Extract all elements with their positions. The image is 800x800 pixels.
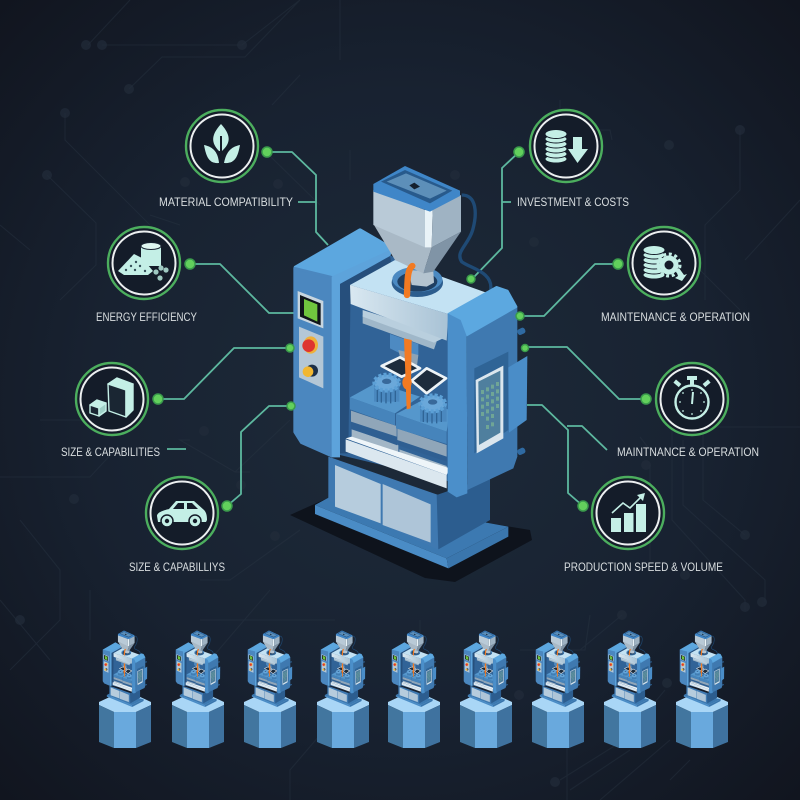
connector lines bbox=[158, 152, 646, 506]
lower shelf bbox=[346, 437, 450, 488]
molten plastic lower stream bbox=[402, 338, 412, 409]
icon: stopwatch bbox=[673, 376, 711, 418]
icon: coin stack with arrow bbox=[545, 130, 588, 163]
badge: material compatibility bbox=[186, 110, 258, 182]
icon: leaves bbox=[204, 124, 240, 163]
mini station 7 bbox=[532, 631, 584, 748]
label: maintenance and operation: MAINTENANCE & OPERATION bbox=[601, 312, 750, 324]
left gear bbox=[374, 375, 399, 403]
right mould stack bbox=[396, 401, 450, 472]
icon: coin stack with gear bbox=[643, 246, 687, 281]
mini station 5 bbox=[388, 631, 440, 748]
hopper bbox=[373, 166, 461, 287]
label: size and capabilities: SIZE & CAPABILITIES bbox=[61, 447, 160, 459]
label: production speed and volume: PRODUCTION SPEED & VOLUME bbox=[564, 562, 723, 574]
badge: maintenance and operation bbox=[628, 227, 700, 299]
badge: size and capabilities bbox=[76, 363, 148, 435]
badge: investment and costs bbox=[530, 110, 602, 182]
mini station 4 bbox=[317, 631, 369, 748]
machine base plate bbox=[315, 495, 508, 568]
right gear bbox=[420, 395, 447, 423]
tablet panel bbox=[474, 352, 508, 453]
control screen bbox=[298, 291, 323, 328]
icon: growth chart bbox=[611, 493, 646, 532]
badge: energy efficiency bbox=[108, 227, 180, 299]
label: material compatibility: MATERIAL COMPATIBILITY bbox=[159, 197, 293, 209]
main machine shadow bbox=[290, 497, 532, 582]
label: investment and costs: INVESTMENT & COSTS bbox=[517, 197, 629, 209]
lower cabinet bbox=[328, 457, 490, 550]
icon: pellets and cylinder bbox=[118, 242, 169, 281]
main machine illustration bbox=[295, 166, 527, 568]
injection cylinder bbox=[390, 334, 418, 368]
right column bbox=[448, 287, 526, 497]
mini station 9 bbox=[676, 631, 728, 748]
icon: car bbox=[157, 501, 207, 527]
connector end dots bbox=[153, 147, 651, 511]
mini station 6 bbox=[460, 631, 512, 748]
side door bbox=[508, 356, 527, 433]
upper press slab bbox=[350, 260, 488, 349]
left mould stack bbox=[350, 383, 420, 454]
hose bbox=[460, 195, 491, 290]
feed collar bbox=[392, 267, 443, 297]
badge: production speed and volume bbox=[592, 477, 664, 549]
badge: cycle time bbox=[656, 363, 728, 435]
left column bbox=[295, 230, 453, 482]
label: cycle time: MAINTNANCE & OPERATION bbox=[617, 447, 759, 459]
molten plastic upper stream bbox=[407, 266, 412, 295]
mini station 8 bbox=[604, 631, 656, 748]
mini station 2 bbox=[172, 631, 224, 748]
badge: vehicle size bbox=[146, 477, 218, 549]
mould frames bbox=[382, 357, 446, 393]
mini station 1 bbox=[99, 631, 151, 748]
mini station 3 bbox=[244, 631, 296, 748]
label: vehicle size: SIZE & CAPABILLIYS bbox=[129, 562, 225, 574]
icon: boxes bbox=[90, 378, 133, 417]
label: energy efficiency: ENERGY EFFICIENCY bbox=[96, 312, 197, 324]
control buttons bbox=[299, 327, 323, 388]
